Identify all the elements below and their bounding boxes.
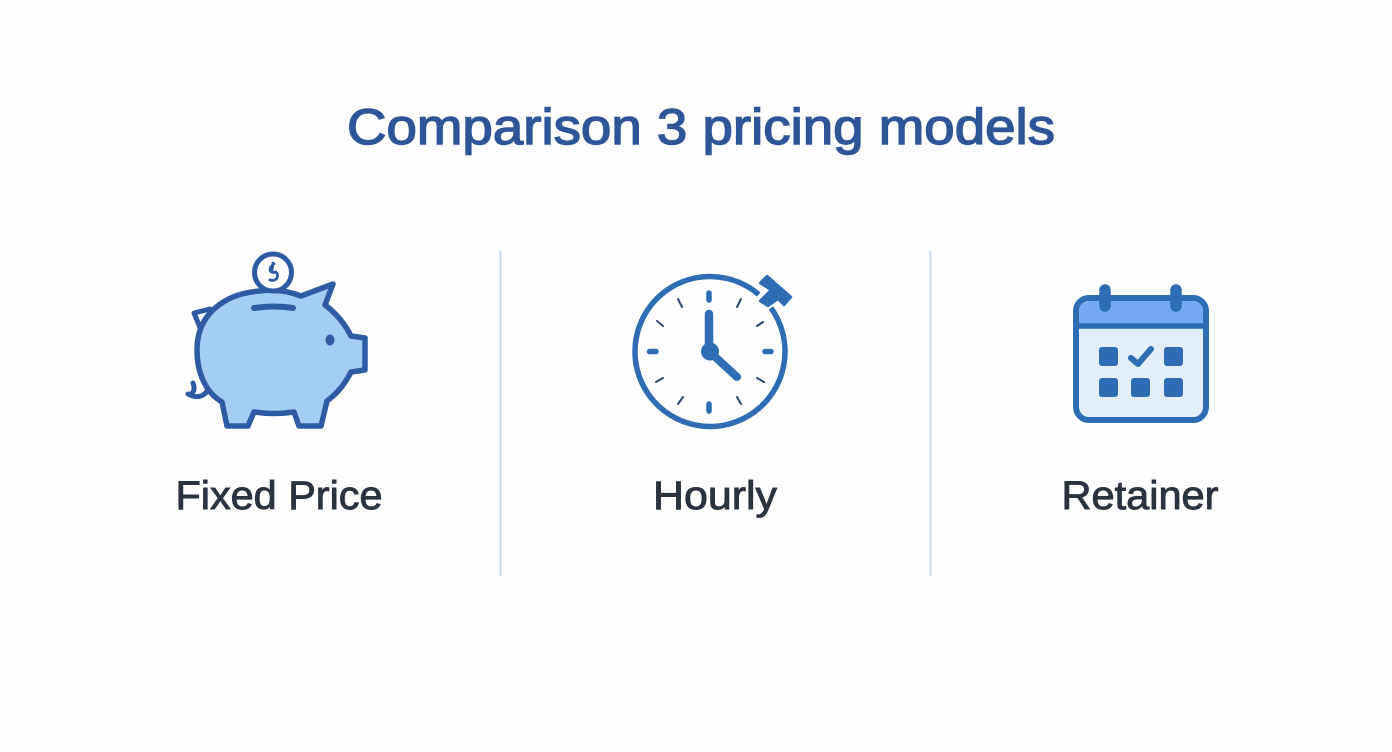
label: Fixed Price: Fixed Price	[176, 474, 382, 518]
title: Comparison 3 pricing models	[347, 99, 1055, 155]
icon: stopwatch clock	[605, 247, 815, 456]
date squares	[1099, 347, 1183, 397]
coin symbol	[270, 263, 278, 280]
clock button	[760, 276, 791, 306]
calendar header	[1079, 301, 1203, 325]
pig eye	[326, 334, 334, 346]
major ticks	[650, 293, 771, 411]
calendar body	[1076, 298, 1206, 420]
icon: piggy bank	[188, 254, 365, 426]
label: Retainer: Retainer	[1062, 474, 1218, 518]
clock hands	[705, 314, 713, 351]
clock ring	[605, 247, 815, 456]
pig body	[197, 284, 365, 426]
minor ticks	[656, 299, 764, 404]
coin	[254, 254, 292, 291]
check mark	[1131, 349, 1151, 364]
calendar rings	[1105, 290, 1176, 306]
pig slot	[254, 306, 293, 308]
pig ear back	[194, 309, 222, 330]
label: Hourly: Hourly	[653, 474, 777, 518]
pig tail	[188, 383, 208, 397]
icon: calendar	[1076, 290, 1206, 420]
